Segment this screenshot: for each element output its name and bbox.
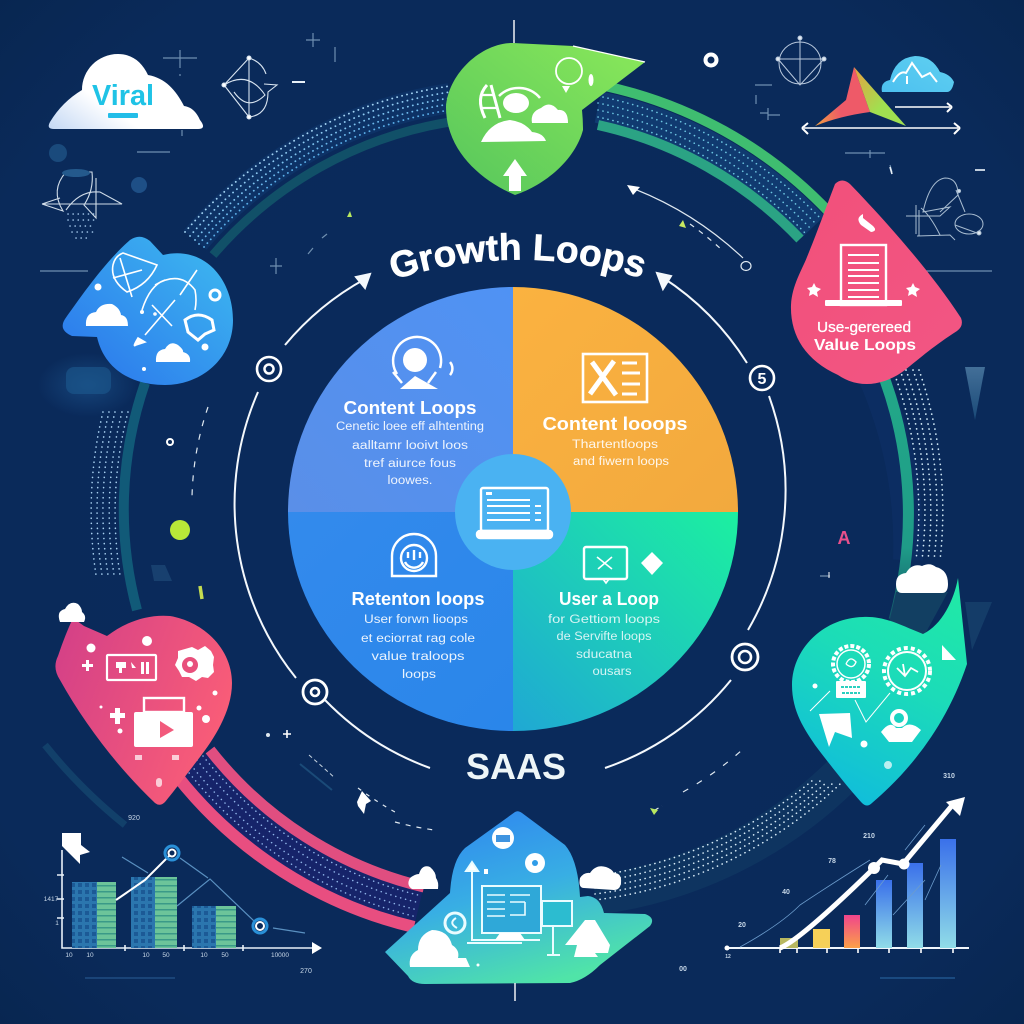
text: user-generated value loops: Value Loops	[814, 337, 916, 354]
segment: content loops blue	[288, 287, 513, 512]
text: user a loop: de Servifte loops	[556, 631, 652, 643]
icon: cloud tag	[59, 603, 85, 622]
text: content loops blue: aalltamr looivt loos	[352, 440, 468, 452]
icon: network sketch and clouds	[86, 253, 220, 371]
icon: media window, gear and video	[82, 636, 218, 787]
accent: letter A: A	[838, 528, 850, 548]
ghost tile under blue drop	[38, 353, 138, 417]
icon: green arrow marker	[650, 808, 658, 815]
label: SAAS: SAAS	[466, 746, 566, 787]
icon: top right compass	[776, 36, 826, 85]
text: content loops blue: tref aiurce fous	[364, 458, 456, 470]
icon: document page	[807, 214, 920, 306]
baseline shadow	[880, 977, 955, 979]
icon: mountain cloud	[882, 56, 954, 92]
markers	[165, 846, 267, 933]
chart labels: 10	[142, 952, 150, 959]
accent: faint glyph	[151, 565, 172, 581]
icon: retention arch	[392, 534, 436, 576]
icon: cloud with leaf and gauge	[480, 58, 594, 191]
chart labels: 50	[162, 952, 170, 959]
pie chart	[288, 287, 738, 731]
accent: small ring	[167, 439, 173, 445]
icon: monitor and clouds	[445, 862, 572, 955]
icon: screen with x and diamond	[584, 547, 663, 583]
accent: green tick	[200, 586, 202, 599]
outer ring: lower-right dotted band	[595, 775, 842, 900]
ticks	[780, 948, 953, 953]
badge: left upper	[257, 357, 281, 381]
callout: viral cloud	[49, 54, 203, 129]
text: content loops orange: and fiwern loops	[573, 456, 669, 468]
chart labels: 1417	[44, 896, 59, 903]
chart labels: 50	[221, 952, 229, 959]
text: retention loops	[352, 589, 484, 681]
chart axes	[57, 850, 318, 951]
text: content loops orange	[542, 414, 688, 468]
text: user a loop: ousars	[592, 666, 632, 678]
ghost wedge behind teal drop	[888, 592, 948, 636]
bars	[780, 938, 798, 948]
icon: gears, keyboard and figures	[810, 645, 956, 769]
shape: top green drop	[446, 20, 645, 195]
chart labels: 10000	[271, 952, 289, 959]
text: user-generated value loops	[814, 319, 916, 354]
icon: left wireframe sketch	[42, 144, 147, 238]
faint triangle right	[965, 602, 992, 650]
text: content loops orange: Thartentloops	[572, 439, 658, 451]
segment: user loop	[513, 512, 738, 731]
footer rule left	[85, 977, 175, 979]
segment: content loops orange	[513, 287, 738, 512]
segment: retention loops	[288, 512, 513, 731]
outer thin dashed ring	[192, 185, 751, 830]
text: content loops blue: Content Loops	[344, 398, 476, 418]
text: retention loops: et eciorrat rag cole	[361, 633, 475, 645]
badge: left lower	[303, 680, 327, 704]
chart labels: 40	[782, 889, 790, 896]
icon: cloud left of bottom shape	[408, 866, 438, 889]
chart labels: 270	[300, 968, 312, 975]
outer ring: upper-right green band	[598, 85, 829, 239]
text: user a loop: for Gettiom loops	[548, 614, 660, 626]
inner ring with arrows	[235, 273, 786, 768]
chart labels: 210	[863, 833, 875, 840]
icon: cloud above teal drop	[896, 564, 948, 593]
icon: laptop	[477, 488, 552, 538]
text: content loops blue	[336, 398, 484, 487]
chart labels: 20	[738, 922, 746, 929]
chart labels: 10	[86, 952, 94, 959]
icon: star on dashed ring	[357, 791, 371, 814]
chart labels	[44, 815, 312, 975]
icon: cloud right of bottom shape	[580, 866, 621, 890]
badge: number 5	[750, 366, 774, 390]
chart labels: 310	[943, 773, 955, 780]
accent: small sparks	[266, 211, 830, 790]
text: user a loop: sducatna	[576, 649, 633, 661]
flag	[62, 833, 90, 864]
chart labels: 78	[828, 858, 836, 865]
shape: left blue drop	[63, 237, 233, 385]
chart labels: 10	[200, 952, 208, 959]
chart labels: 920	[128, 815, 140, 822]
shape: right teal drop	[792, 578, 967, 806]
badge: right lower	[732, 644, 758, 670]
shape: left pink drop	[55, 603, 232, 805]
text: retention loops: value traloops	[372, 651, 465, 663]
accent: green dot	[170, 520, 190, 540]
growth arrow	[780, 802, 955, 948]
text: retention loops: User forwn lioops	[364, 614, 468, 626]
text: content loops orange: Content looops	[542, 414, 688, 434]
shape: bottom blue-green cloud	[385, 811, 652, 1001]
faint triangle upper right	[965, 367, 985, 420]
title: Growth Loops	[390, 232, 644, 277]
outer ring: upper-left dotted band	[185, 86, 450, 255]
text: retention loops: Retenton loops	[352, 589, 484, 609]
icon: arrow up	[503, 159, 527, 191]
decorative crosses	[40, 33, 992, 274]
callout: viral cloud: Viral	[92, 80, 154, 112]
icon: top ring circle	[706, 54, 716, 66]
chart labels: 00	[679, 966, 687, 973]
baseline	[727, 947, 969, 949]
thin curves	[740, 825, 941, 947]
bars	[72, 882, 97, 948]
outer ring: right teal band	[870, 370, 943, 620]
chart labels: 10	[65, 952, 73, 959]
badge: number 5: 5	[758, 371, 767, 388]
chart: right growth chart	[679, 773, 969, 978]
outer ring: lower-left pink band	[177, 750, 424, 927]
text: user a loop	[548, 589, 660, 678]
text: user-generated value loops: Use-gerereed	[817, 319, 911, 336]
center circle	[455, 454, 571, 570]
chart labels: 1	[55, 920, 59, 927]
text: content loops blue: Cenetic loee eff alhtenting	[336, 421, 484, 433]
shape: right pink drop	[791, 180, 962, 384]
text: user a loop: User a Loop	[559, 589, 659, 609]
text: content loops blue: loowes.	[388, 475, 432, 487]
text: retention loops: loops	[402, 669, 436, 681]
icon: right wireframe sketch	[890, 167, 985, 240]
icon: document with x	[583, 354, 647, 402]
icon: gradient triangle with arrows	[802, 56, 960, 134]
chart: left bar chart	[44, 815, 322, 975]
outer ring: left teal band	[45, 383, 145, 825]
icon: person headset	[393, 337, 452, 389]
trend lines	[116, 855, 170, 900]
chart labels: 12	[725, 954, 731, 960]
icon: top-left compass	[222, 56, 305, 119]
chart labels	[679, 773, 955, 973]
